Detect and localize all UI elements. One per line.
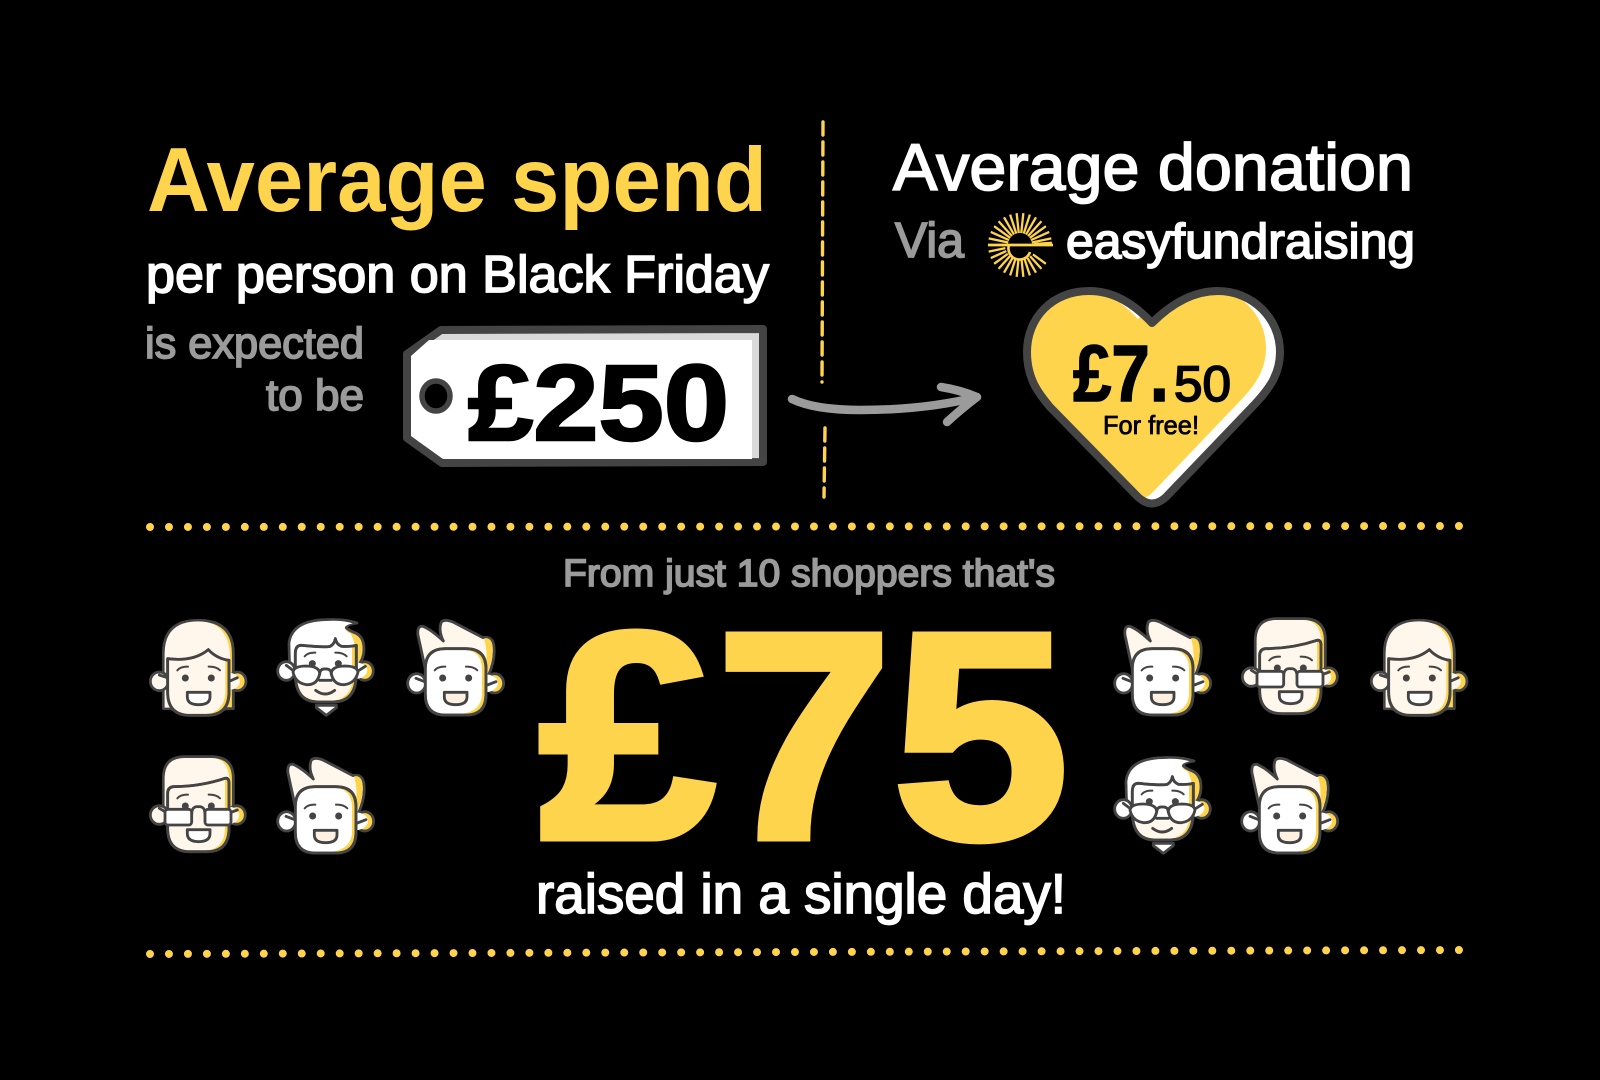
- heart: £7.50 for free: [1013, 287, 1280, 504]
- shopper icon: spiky hair, left row 2: [278, 758, 374, 853]
- shopper icon: older man, left row 1: [278, 619, 373, 715]
- price tag: £250: £250: [468, 342, 729, 463]
- heart: £7.50 for free: For free!: [1103, 410, 1199, 440]
- text: is expected to be: to be: [266, 371, 364, 420]
- heading: average spend: Average spend: [147, 130, 767, 231]
- arrow: [792, 387, 977, 422]
- text: easyfundraising wordmark: easyfundraising: [1066, 215, 1415, 269]
- price tag: £250: [407, 329, 763, 463]
- subheading: per person on Black Friday: per person on Black Friday: [146, 246, 769, 304]
- shopper icon: spiky hair, left row 1: [408, 620, 504, 715]
- text: is expected to be: [145, 319, 364, 420]
- text: via: Via: [895, 214, 965, 268]
- shopper icon: spiky hair, right row 2: [1242, 758, 1338, 853]
- icon: easyfundraising sun logo: [988, 213, 1053, 277]
- shopper icon: woman, right row 1: [1371, 620, 1467, 715]
- text: is expected to be: is expected: [145, 319, 364, 368]
- shopper icon: man with glasses, left row 2: [150, 757, 245, 852]
- text: from just 10 shoppers: From just 10 shoppers that's: [563, 553, 1055, 595]
- divider: upper dotted line: [150, 526, 1462, 527]
- divider: vertical dashed line: [822, 122, 825, 497]
- shopper icon: man with glasses, right row 1: [1242, 619, 1337, 714]
- heart: £7.50 for free: £7.: [1073, 329, 1169, 418]
- text: raised in a single day: raised in a single day!: [536, 862, 1066, 925]
- divider: lower dotted line: [150, 950, 1462, 954]
- heart: £7.50 for free: 50: [1174, 356, 1231, 412]
- shopper icon: older man, right row 2: [1115, 757, 1210, 853]
- shopper icon: woman, left row 1: [150, 620, 246, 715]
- shopper icon: spiky hair, right row 1: [1115, 620, 1211, 715]
- heading: average donation: Average donation: [893, 130, 1413, 204]
- big number: £75: £75: [539, 571, 1069, 901]
